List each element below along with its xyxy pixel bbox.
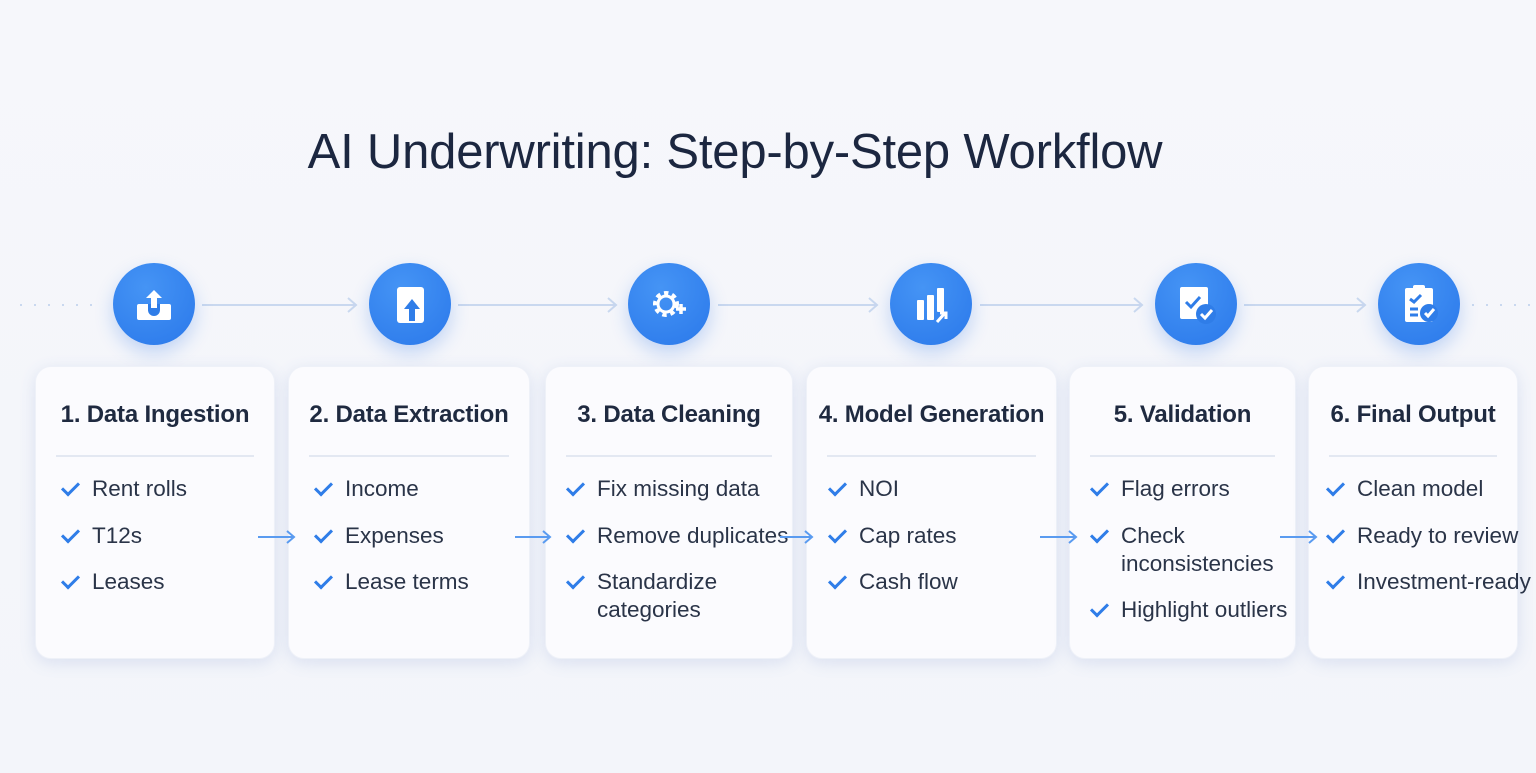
panel: 1 data ingestion: T12s	[92, 523, 142, 548]
panel: 3 data cleaning: categories	[597, 597, 701, 622]
icon: document extraction	[369, 263, 451, 345]
icon: upload	[113, 263, 195, 345]
panel: 2 data extraction: Lease terms	[345, 569, 469, 594]
panel: 4 model generation: Cash flow	[859, 569, 958, 594]
title: AI Underwriting: Step-by-Step Workflow	[308, 125, 1162, 179]
panel: 1 data ingestion: Rent rolls	[92, 476, 187, 501]
panel: 4 model generation: Cap rates	[859, 523, 957, 548]
panel: 6 final output: Ready to review	[1357, 523, 1518, 548]
panel: 3 data cleaning: Fix missing data	[597, 476, 760, 501]
panel: 2 data extraction: 2. Data Extraction	[309, 401, 509, 428]
panel: 3 data cleaning	[545, 366, 793, 659]
icon: validation check	[1155, 263, 1237, 345]
panel: 2 data extraction: Expenses	[345, 523, 444, 548]
panel: 1 data ingestion: Leases	[92, 569, 165, 594]
panel: 5 validation: Highlight outliers	[1121, 597, 1287, 622]
small arrows between cards	[258, 530, 1318, 544]
panel: 5 validation: inconsistencies	[1121, 551, 1274, 576]
panel: 6 final output: 6. Final Output	[1330, 401, 1496, 428]
panel: 2 data extraction: Income	[345, 476, 419, 501]
panel: 1 data ingestion: 1. Data Ingestion	[61, 401, 249, 428]
icon: bar chart	[890, 263, 972, 345]
panel: 4 model generation: NOI	[859, 476, 899, 501]
panel: 4 model generation: 4. Model Generation	[819, 401, 1044, 428]
panel: 6 final output	[1308, 366, 1518, 659]
panel: 2 data extraction	[288, 366, 530, 659]
icon: gear	[628, 263, 710, 345]
panel: 3 data cleaning: Remove duplicates	[597, 523, 788, 548]
panel: 6 final output: Investment-ready	[1357, 569, 1531, 594]
panel: 4 model generation	[806, 366, 1057, 659]
panel: 5 validation: Flag errors	[1121, 476, 1230, 501]
panel: 3 data cleaning: Standardize	[597, 569, 717, 594]
connector line with arrows	[20, 297, 1530, 313]
panel: 3 data cleaning: 3. Data Cleaning	[577, 401, 761, 428]
panel: 5 validation: Check	[1121, 523, 1185, 548]
panel: 5 validation: 5. Validation	[1114, 401, 1251, 428]
icon: clipboard output	[1378, 263, 1460, 345]
panel: 5 validation	[1069, 366, 1296, 659]
panel: 1 data ingestion	[35, 366, 275, 659]
panel: 6 final output: Clean model	[1357, 476, 1483, 501]
